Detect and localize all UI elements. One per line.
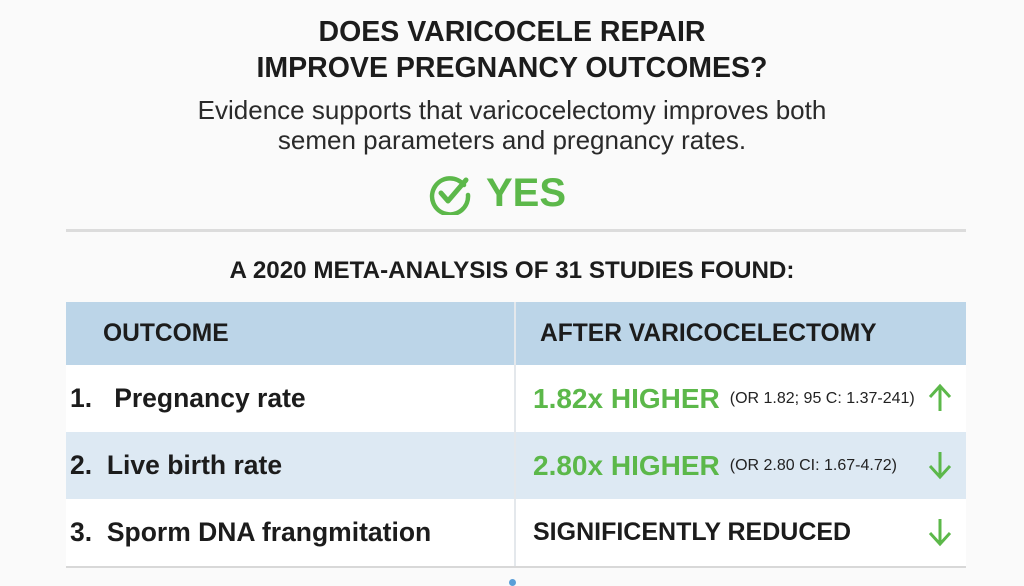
row: pregnancy rate: 1.82x HIGHER xyxy=(533,382,720,414)
verdict: yes: YES xyxy=(486,170,566,214)
table xyxy=(66,302,966,568)
row: DNA fragmentation: 3. Sporm DNA frangmitation xyxy=(70,517,431,547)
row: DNA fragmentation: SIGNIFICENTLY REDUCED xyxy=(533,518,851,546)
row: pregnancy rate: (OR 1.82; 95 C: 1.37-241) xyxy=(730,390,915,406)
row: live birth rate: 2. Live birth rate xyxy=(70,450,282,480)
row: live birth rate: 2.80x HIGHER xyxy=(533,450,720,480)
row: pregnancy rate xyxy=(66,365,966,432)
row: live birth rate: (OR 2.80 CI: 1.67-4.72) xyxy=(730,456,897,474)
section heading: A 2020 META-ANALYSIS OF 31 STUDIES FOUND: xyxy=(230,257,794,284)
title xyxy=(257,16,767,84)
subtitle: semen parameters and pregnancy rates. xyxy=(278,125,746,155)
table header: OUTCOME xyxy=(103,320,229,346)
subtitle xyxy=(198,95,826,155)
verdict: yes xyxy=(430,170,566,215)
icon: check circle xyxy=(430,176,470,215)
row: DNA fragmentation xyxy=(66,499,966,568)
row: live birth rate xyxy=(66,432,966,499)
table header xyxy=(66,302,966,365)
icon: down arrow xyxy=(929,452,951,480)
icon: up arrow xyxy=(929,384,951,411)
title: DOES VARICOCELE REPAIR xyxy=(319,16,705,48)
title: IMPROVE PREGNANCY OUTCOMES? xyxy=(257,52,767,84)
subtitle: Evidence supports that varicocelectomy improves both xyxy=(198,95,826,125)
table header: AFTER VARICOCELECTOMY xyxy=(540,320,877,346)
row: pregnancy rate: 1. Pregnancy rate xyxy=(70,383,306,413)
icon: down arrow xyxy=(929,519,951,546)
